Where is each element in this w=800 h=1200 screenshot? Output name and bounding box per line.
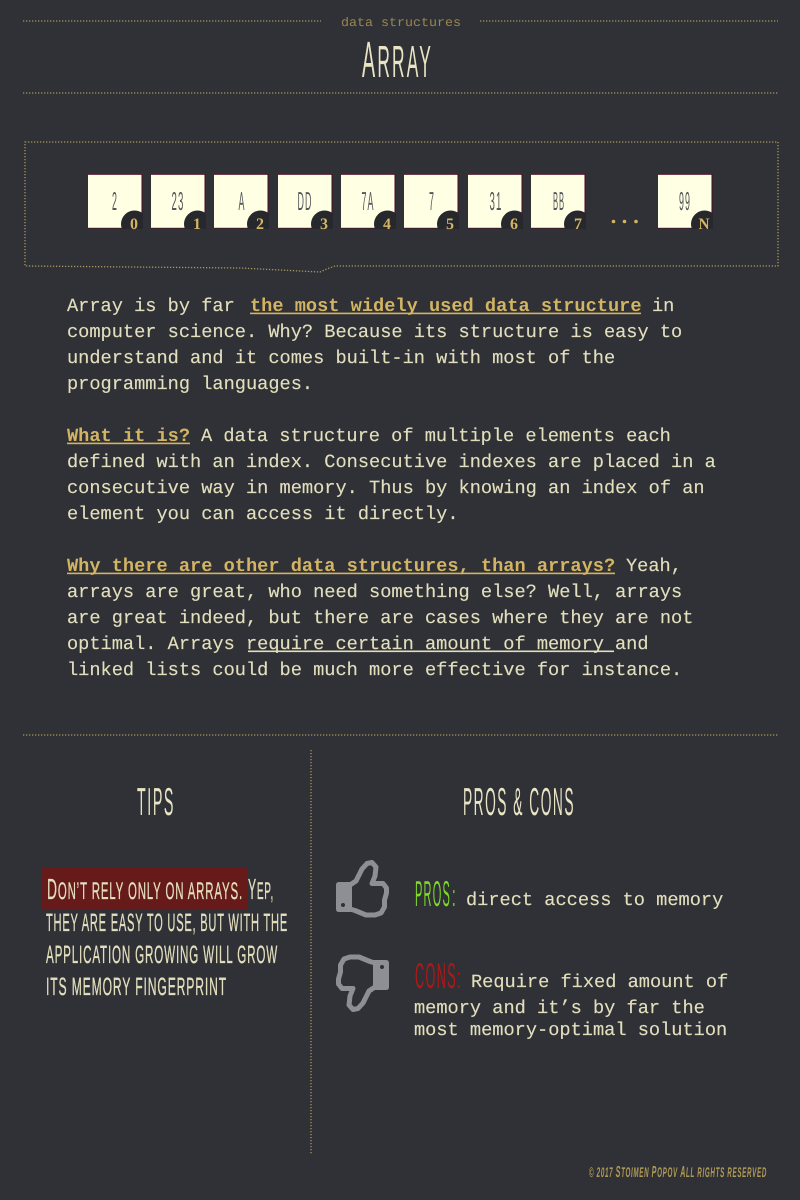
text block: introduction xyxy=(67,295,682,395)
array cell 7: 7 xyxy=(574,216,582,233)
icon: thumbs up xyxy=(336,862,386,915)
cons text xyxy=(414,971,728,1041)
array cell 2: 2 xyxy=(256,216,264,233)
text block: what it is: A data structure of multiple elements each xyxy=(201,425,671,447)
text block: what it is xyxy=(67,425,716,525)
panel: pros and cons: PROS xyxy=(415,873,451,914)
array cell 3: DD xyxy=(298,186,312,216)
array cell N: 99 xyxy=(679,186,691,216)
icon: thumbs down xyxy=(338,957,389,1010)
text block: introduction: the most widely used data structure xyxy=(250,295,642,317)
panel: pros and cons xyxy=(336,781,728,1041)
text block: why other structures: arrays are great, who need something else? Well, arrays xyxy=(67,581,682,603)
array cell 3: 3 xyxy=(320,216,328,233)
array cell 7 xyxy=(531,174,586,229)
text block: why other structures: Yeah, xyxy=(626,555,682,577)
category label: data structures xyxy=(341,16,461,30)
array cell 6: 6 xyxy=(510,216,518,233)
array cell 5 xyxy=(404,174,459,230)
array cell 1 xyxy=(151,174,206,229)
array cell 5: 5 xyxy=(446,216,454,233)
cons text: memory and it’s by far the xyxy=(414,997,705,1019)
array cell 5: 7 xyxy=(429,186,435,216)
array cell N xyxy=(658,174,713,229)
text block: why other structures xyxy=(67,555,693,681)
text block: what it is: defined with an index. Consecutive indexes are placed in a xyxy=(67,451,716,473)
array cell 2: A xyxy=(238,186,246,216)
text block: why other structures: optimal. Arrays require certain amount of memory xyxy=(67,633,604,655)
panel: tips xyxy=(42,781,288,1001)
array cell 1: 1 xyxy=(193,216,201,233)
array cell 0: 0 xyxy=(130,216,138,233)
panel: pros and cons: PROS & CONS xyxy=(463,781,575,824)
text block: introduction: in xyxy=(652,295,674,317)
highlight box xyxy=(42,868,247,909)
array cell N: N xyxy=(698,216,710,233)
text block: why other structures: and xyxy=(615,633,649,655)
panel: tips: TIPS xyxy=(137,781,175,824)
text block: introduction: Array is by far xyxy=(67,295,235,317)
panel: array diagram xyxy=(25,142,778,272)
array cell 2 xyxy=(214,174,269,229)
text block: what it is: What it is? xyxy=(67,425,190,447)
text block: introduction: computer science. Why? Because its structure is easy to xyxy=(67,321,682,343)
panel: pros and cons: : xyxy=(457,962,462,995)
panel: pros and cons: : xyxy=(452,880,457,913)
text block: what it is: consecutive way in memory. Thus by knowing an index of an xyxy=(67,477,705,499)
cons text: Require fixed amount of xyxy=(471,971,728,993)
array cell 6 xyxy=(468,174,523,230)
text block: what it is: element you can access it directly. xyxy=(67,503,459,525)
pros text: direct access to memory xyxy=(466,889,723,911)
text: APPLICATION GROWING WILL GROW xyxy=(46,941,278,969)
panel: pros and cons: CONS xyxy=(415,955,457,996)
text: ARRAY xyxy=(362,31,433,88)
array cell 7: BB xyxy=(553,186,565,216)
text: THEY ARE EASY TO USE, BUT WITH THE xyxy=(46,909,288,937)
array cell 4: 4 xyxy=(383,216,391,233)
array cell 3 xyxy=(278,174,333,230)
tips text xyxy=(46,874,288,1001)
text block: introduction: programming languages. xyxy=(67,373,313,395)
array cell 4: 7A xyxy=(362,186,374,216)
tips text: ITS MEMORY FINGERPRINT xyxy=(46,973,227,1001)
array cell 4 xyxy=(341,174,396,229)
array cell 6: 31 xyxy=(490,186,502,216)
tips text: YEP, xyxy=(248,874,274,906)
array cell 0: 2 xyxy=(112,186,118,216)
ellipsis dots xyxy=(612,220,638,223)
text block: why other structures: Why there are other data structures, than arrays? xyxy=(67,555,615,577)
text block: why other structures: linked lists could be much more effective for instance. xyxy=(67,659,682,681)
array cell 1: 23 xyxy=(172,186,184,216)
tips text: DON’T RELY ONLY ON ARRAYS. xyxy=(47,874,243,906)
text block: why other structures: are great indeed, but there are cases where they are not xyxy=(67,607,693,629)
text block: introduction: understand and it comes built-in with most of the xyxy=(67,347,615,369)
array cell 0 xyxy=(88,174,143,230)
cons text: most memory-optimal solution xyxy=(414,1019,727,1041)
